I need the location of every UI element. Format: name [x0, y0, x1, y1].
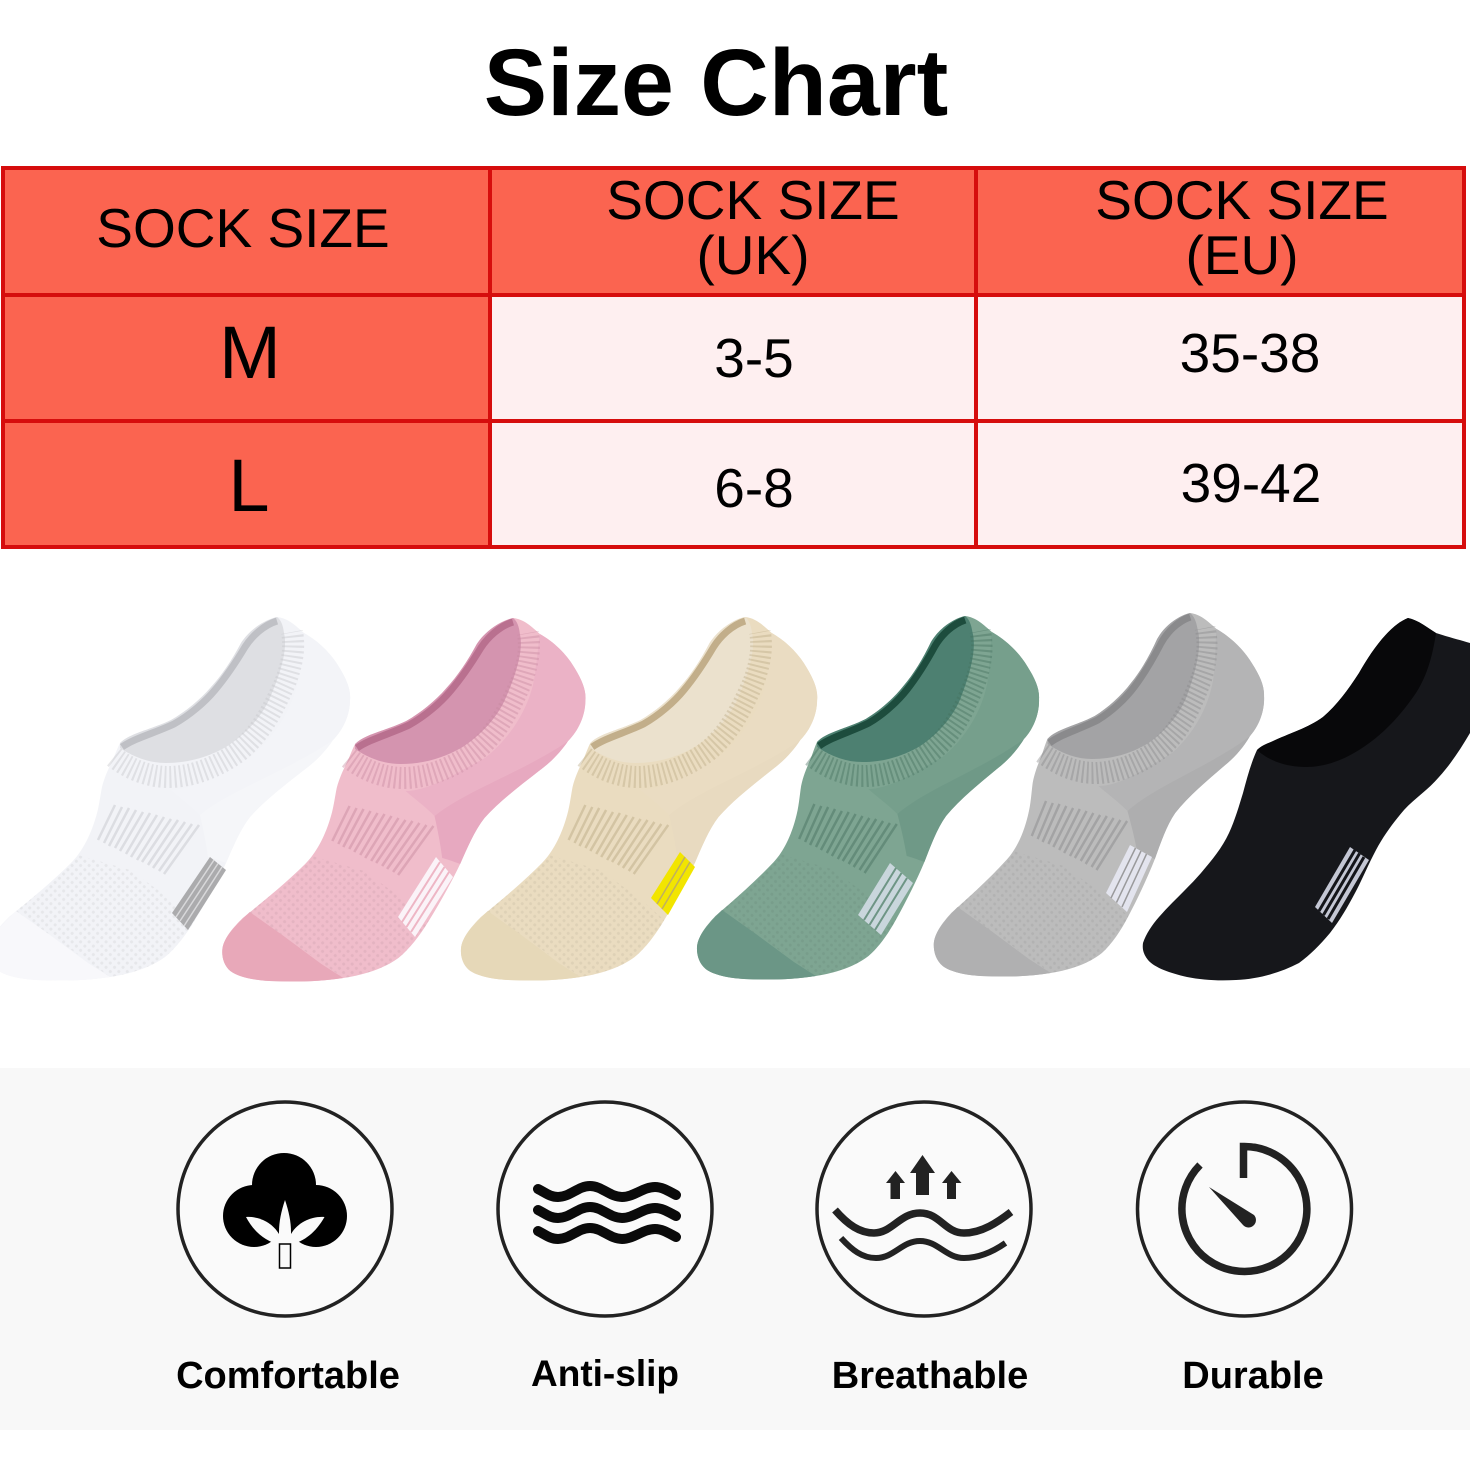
- sock: green: [685, 616, 1049, 980]
- value EU L: 39-42: [1181, 452, 1321, 514]
- row label M: M: [219, 311, 281, 394]
- label: Anti-slip: [531, 1353, 679, 1394]
- header: sock size EU: (EU): [1185, 224, 1299, 286]
- header: sock size EU: SOCK SIZE: [1095, 169, 1389, 231]
- size table: [3, 168, 1464, 547]
- icon: arrows and waves in circle: [817, 1102, 1031, 1316]
- label: Comfortable: [176, 1355, 400, 1397]
- header: sock size UK: (UK): [696, 224, 810, 286]
- feature: anti-slip: [498, 1102, 712, 1394]
- title: Size Chart: [484, 30, 948, 136]
- value UK M: 3-5: [714, 327, 794, 389]
- sock: grey: [916, 613, 1279, 977]
- icon: waves in circle: [498, 1102, 712, 1316]
- icon: dial in circle: [1138, 1102, 1352, 1316]
- header: sock size: SOCK SIZE: [96, 197, 390, 259]
- label: Breathable: [832, 1355, 1028, 1397]
- feature: durable: [1138, 1102, 1352, 1397]
- header: sock size UK: SOCK SIZE: [606, 169, 900, 231]
- label: Durable: [1182, 1355, 1324, 1397]
- sock: beige: [461, 617, 817, 981]
- background band: [0, 1068, 1470, 1430]
- row label L: L: [228, 444, 270, 527]
- value UK L: 6-8: [714, 457, 794, 519]
- feature: breathable: [817, 1102, 1031, 1397]
- sock: white: [0, 617, 350, 981]
- sock: black: [1143, 618, 1470, 980]
- feature: comfortable: [176, 1102, 400, 1397]
- icon: cotton in circle: [178, 1102, 392, 1316]
- table grid lines: [3, 168, 1464, 547]
- value EU M: 35-38: [1180, 322, 1320, 384]
- table cell fills: [3, 168, 1464, 547]
- sock: pink: [222, 618, 586, 982]
